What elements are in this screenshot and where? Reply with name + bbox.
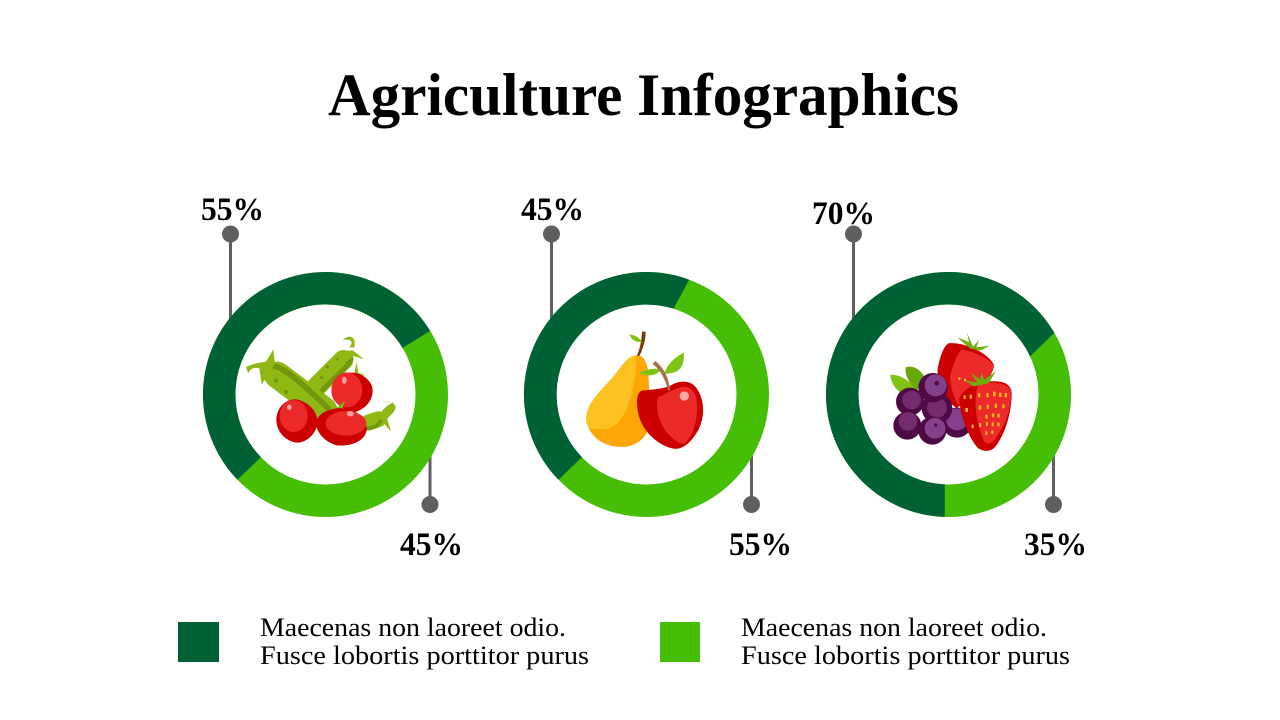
legend: dark green bbox=[178, 613, 589, 670]
leader line bottom 55% bbox=[743, 450, 760, 513]
legend text bbox=[741, 613, 1070, 670]
icon: blueberries and strawberries bbox=[890, 333, 1012, 451]
donut chart 55/45 bbox=[203, 272, 432, 501]
legend swatch dark green bbox=[178, 622, 219, 662]
panel: pear and apple donut bbox=[521, 192, 792, 563]
leader line bottom 35% bbox=[1045, 450, 1062, 513]
donut chart 70/35 bbox=[826, 272, 1055, 517]
leader line bottom 45% bbox=[422, 450, 438, 513]
label 45%: 45% bbox=[521, 192, 584, 228]
icon: pear and apple bbox=[586, 332, 703, 449]
label 45%: 45% bbox=[400, 527, 463, 563]
label 70%: 70% bbox=[812, 196, 875, 232]
legend swatch light green bbox=[660, 622, 700, 662]
label 55%: 55% bbox=[729, 527, 792, 563]
legend text bbox=[260, 613, 589, 670]
legend: light green bbox=[660, 613, 1070, 670]
title: Agriculture Infographics bbox=[328, 62, 959, 128]
legend text: Fusce lobortis porttitor purus bbox=[741, 641, 1070, 670]
icon: cucumbers and tomatoes bbox=[246, 337, 396, 446]
panel: berries donut bbox=[812, 196, 1087, 563]
donut chart 45/55 bbox=[524, 272, 753, 501]
legend text: Maecenas non laoreet odio. bbox=[260, 613, 566, 642]
label 35%: 35% bbox=[1024, 527, 1087, 563]
panel: cucumber and tomato donut bbox=[201, 192, 463, 563]
leader line top 70% bbox=[845, 226, 862, 325]
legend text: Fusce lobortis porttitor purus bbox=[260, 641, 589, 670]
leader line top 45% bbox=[543, 226, 560, 325]
legend text: Maecenas non laoreet odio. bbox=[741, 613, 1047, 642]
label 55%: 55% bbox=[201, 192, 264, 228]
leader line top 55% bbox=[222, 226, 239, 325]
